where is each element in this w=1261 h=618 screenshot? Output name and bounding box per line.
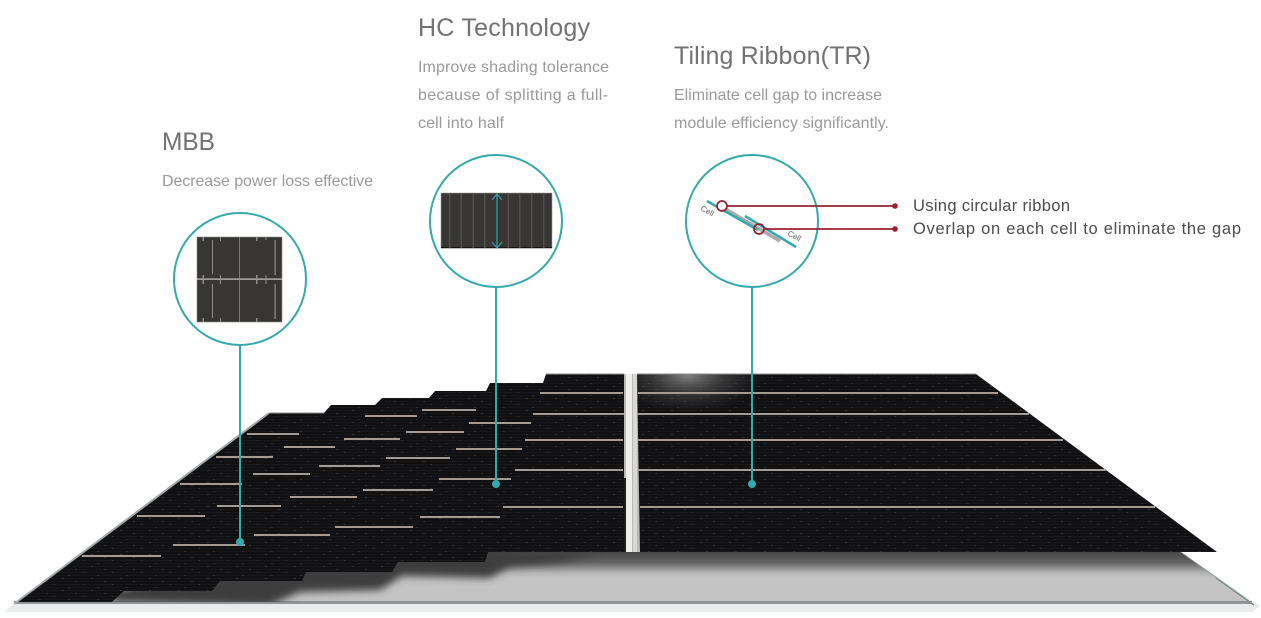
MBB circle with multi busbar cell (174, 213, 306, 345)
HC heading: HC Technology (418, 14, 590, 42)
TR circle with overlapping cells: Cell (786, 229, 803, 243)
HC anchor dot (492, 480, 500, 488)
HC leader line (495, 287, 497, 484)
module centre junction frame (624, 374, 640, 552)
TR description: Eliminate cell gap to increase (674, 87, 882, 104)
HC description: cell into half (418, 115, 505, 132)
HC description: Improve shading tolerance (418, 59, 609, 76)
left half ribbon gaps (82, 393, 624, 556)
HC description (418, 59, 609, 132)
red pointer: circular ribbon (717, 201, 898, 211)
red pointer: overlap (754, 224, 898, 234)
TR description (674, 87, 889, 132)
pointer label: overlap: Overlap on each cell to eliminate the gap (913, 220, 1241, 238)
HC circle with half cell (430, 155, 562, 287)
HC description: because of splitting a full- (418, 87, 608, 104)
right half ribbon gaps (637, 393, 1155, 507)
TR anchor dot (748, 480, 756, 488)
MBB description: Decrease power loss effective (162, 173, 373, 190)
MBB leader line (239, 345, 241, 542)
TR circle with overlapping cells (686, 155, 818, 287)
Tiling Ribbon callout (674, 42, 1241, 488)
solar module left half with half-cut stepped cells (14, 374, 624, 604)
double arrow: cell height (492, 194, 502, 248)
MBB callout (162, 128, 373, 546)
TR circle with overlapping cells: Cell (699, 204, 716, 218)
solar module right half (637, 374, 1217, 552)
pointer label: circular ribbon: Using circular ribbon (913, 197, 1070, 215)
solar module base plate (4, 552, 1260, 612)
TR description: module efficiency significantly. (674, 115, 889, 132)
MBB heading: MBB (162, 128, 215, 156)
HC Technology callout (418, 14, 609, 488)
TR leader line (751, 287, 753, 484)
MBB anchor dot (236, 538, 244, 546)
TR heading: Tiling Ribbon(TR) (674, 42, 871, 70)
